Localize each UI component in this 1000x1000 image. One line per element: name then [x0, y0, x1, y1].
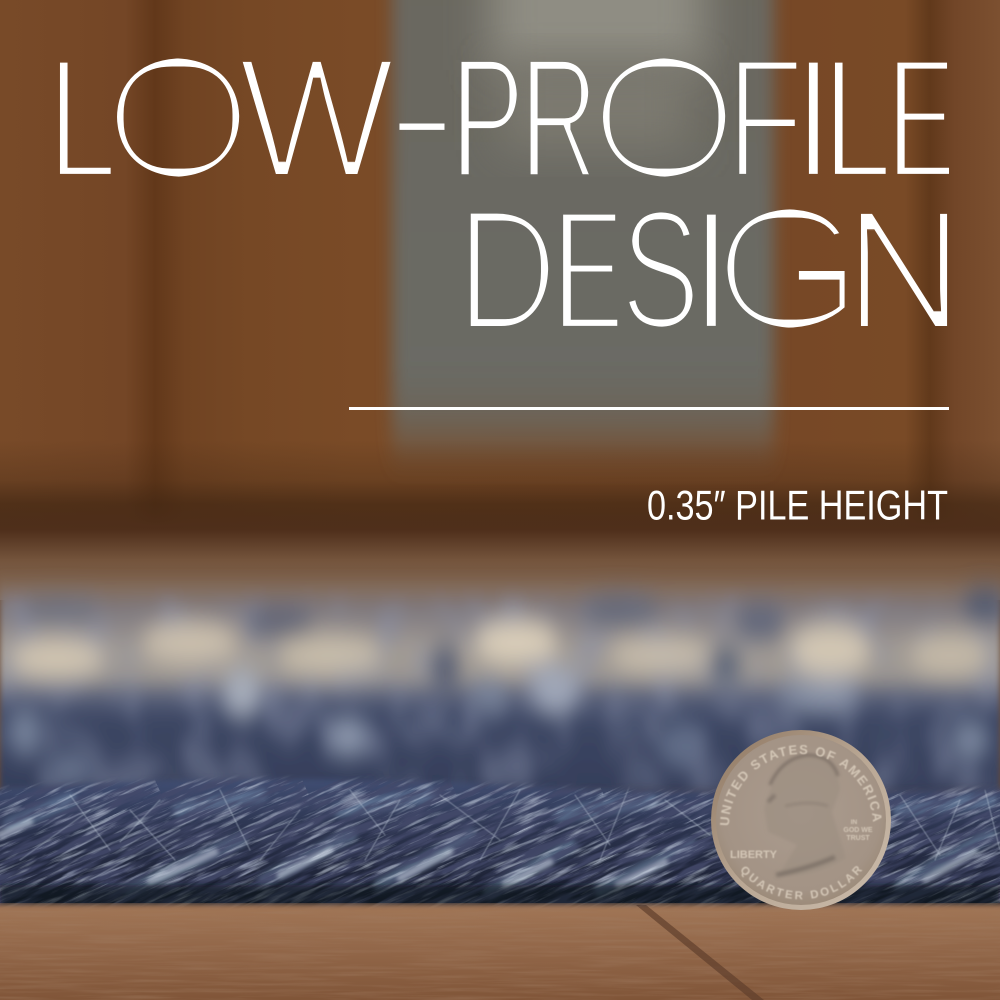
coin lettering: TRUST [846, 835, 870, 842]
title: LOW-PROFILE DESIGN: D [456, 175, 558, 366]
title: LOW-PROFILE DESIGN: F [726, 23, 804, 215]
coin lettering: UNITED STATES OF AMERICA [720, 744, 882, 826]
title: LOW-PROFILE DESIGN: R [520, 22, 598, 214]
title: LOW-PROFILE DESIGN: N [844, 178, 964, 363]
divider line [349, 407, 949, 410]
title: LOW-PROFILE DESIGN: S [621, 175, 700, 363]
title: LOW-PROFILE DESIGN: W [238, 26, 395, 211]
title: LOW-PROFILE DESIGN: E [888, 22, 954, 214]
title: LOW-PROFILE DESIGN: O [588, 21, 741, 215]
rug: braided edge [0, 776, 1000, 908]
title: LOW-PROFILE DESIGN: I [797, 23, 829, 215]
wood floor [0, 902, 1000, 1000]
background: blurred wall and door [0, 0, 1000, 600]
title: LOW-PROFILE DESIGN: G [712, 170, 865, 366]
background: dark floor junction [0, 440, 1000, 600]
coin lettering: LIBERTY [730, 849, 778, 861]
coin portrait [764, 755, 846, 876]
icon: US quarter coin [711, 730, 891, 910]
coin lettering: QUARTER DOLLAR [741, 866, 862, 900]
title: LOW-PROFILE DESIGN [48, 17, 964, 367]
title: LOW-PROFILE DESIGN: E [554, 174, 623, 367]
rug: blurred top surface [0, 585, 1000, 800]
coin lettering [720, 744, 882, 900]
title: LOW-PROFILE DESIGN: P [451, 21, 524, 214]
title: LOW-PROFILE DESIGN: I [695, 175, 727, 367]
title: LOW-PROFILE DESIGN: - [390, 17, 454, 209]
title: LOW-PROFILE DESIGN: L [48, 21, 117, 214]
coin lettering: GOD WE [843, 827, 873, 834]
coin lettering: IN [851, 819, 858, 826]
title: LOW-PROFILE DESIGN: L [823, 21, 892, 214]
title: LOW-PROFILE DESIGN: O [102, 21, 255, 215]
